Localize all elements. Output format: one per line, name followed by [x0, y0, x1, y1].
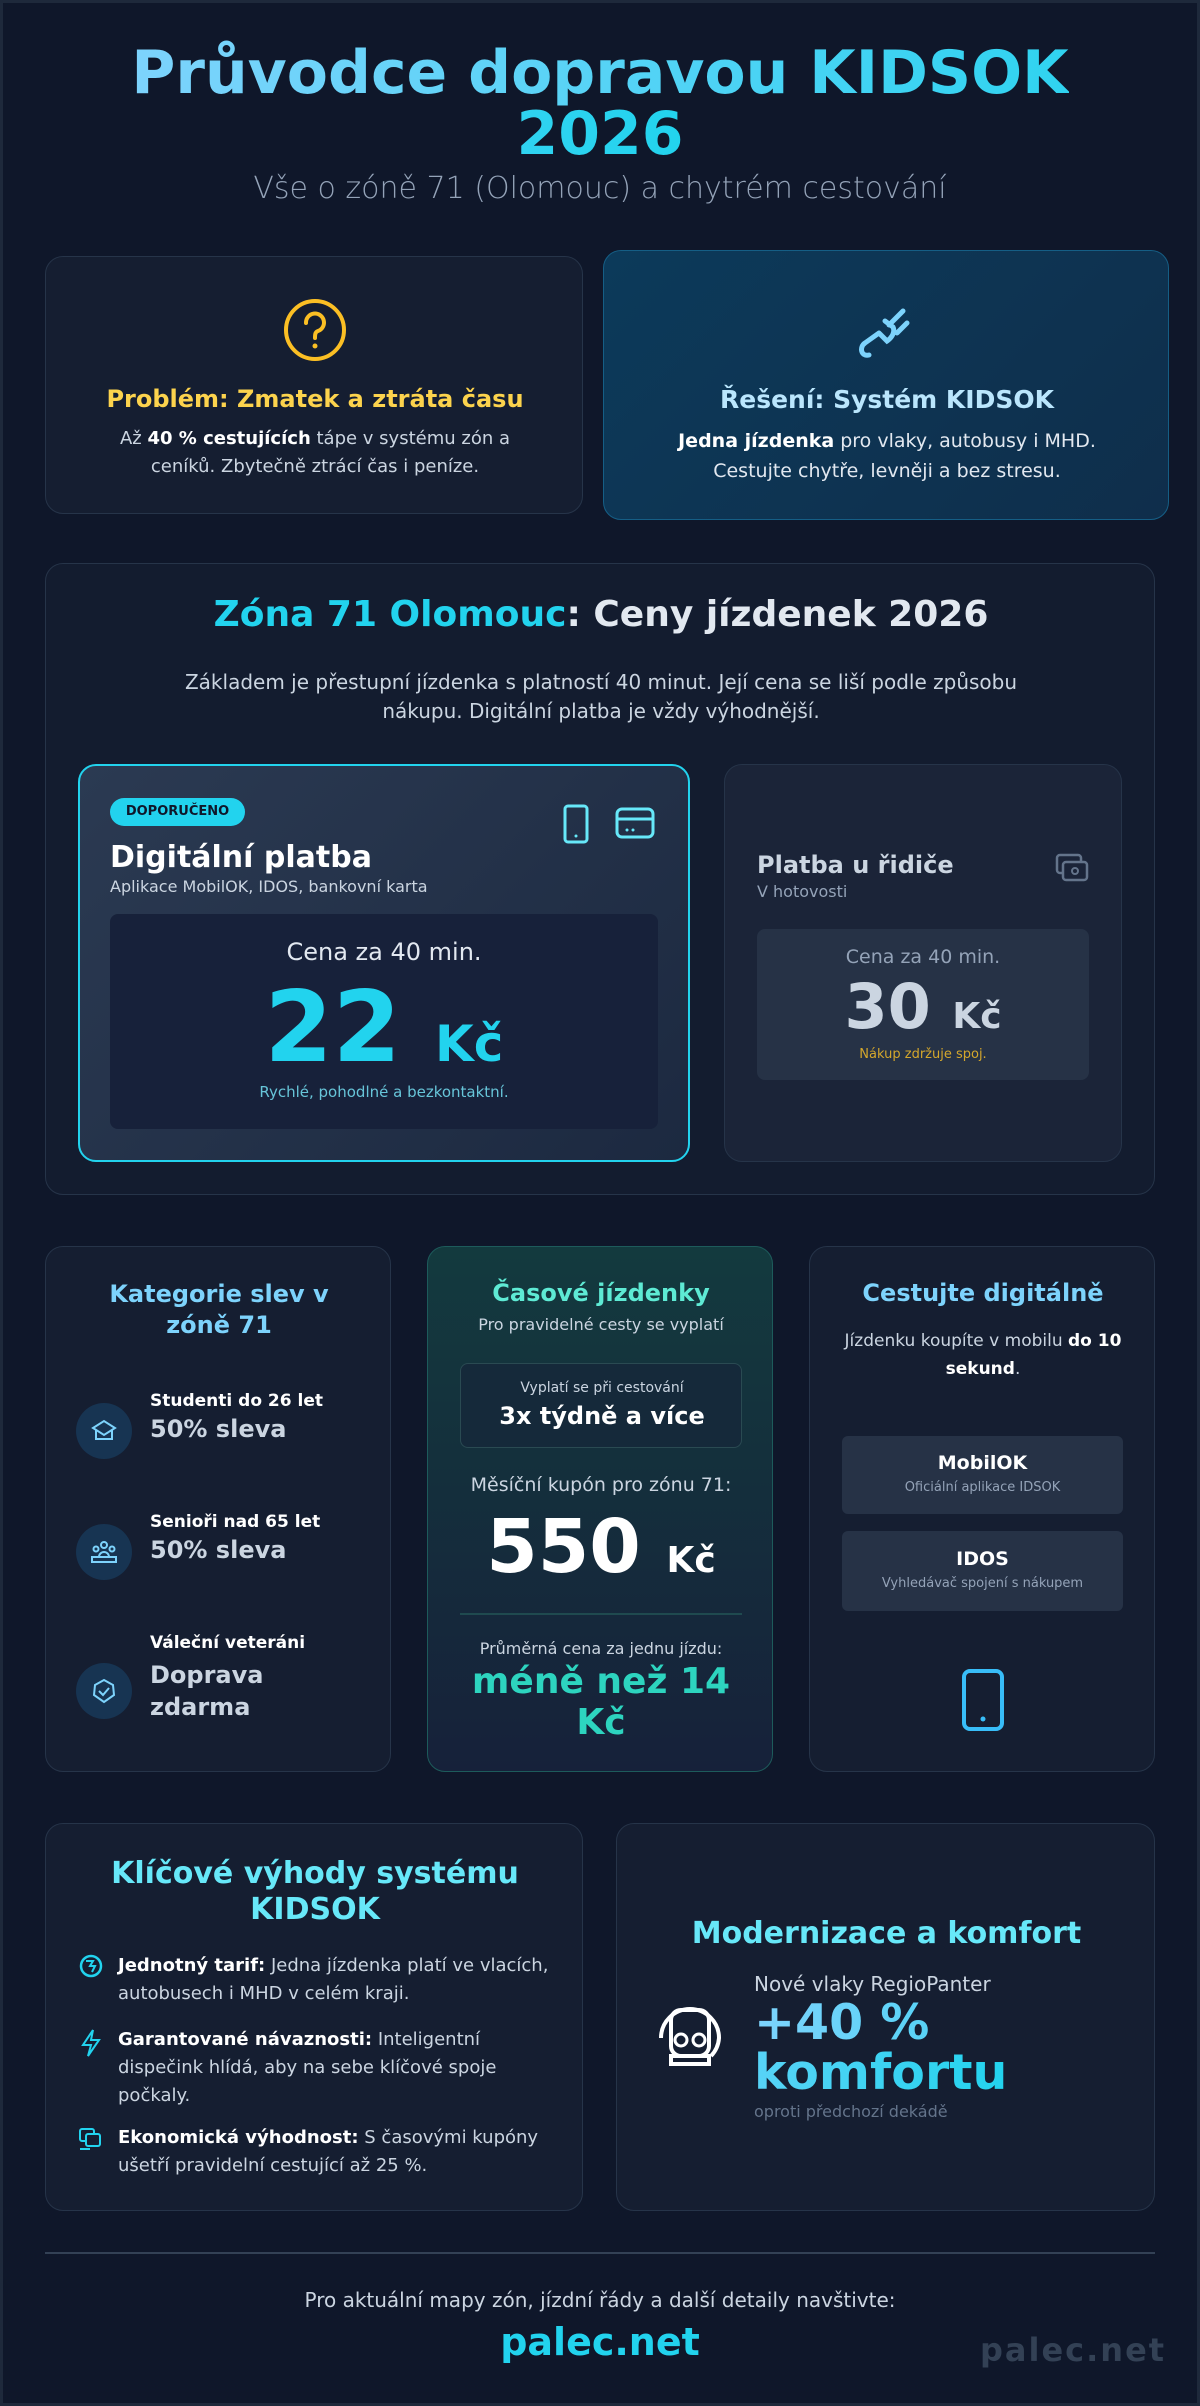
panel: modernization [616, 1823, 1155, 2211]
app: MobilOK [842, 1436, 1123, 1514]
icon: cash [1056, 854, 1088, 882]
heading: Modernizace a komfort [692, 1916, 1081, 1951]
price box: Nákup zdržuje spoj. [859, 1047, 987, 1062]
stat: oproti předchozí dekádě [754, 2102, 948, 2121]
icon: card [616, 808, 654, 838]
text: Až 40 % cestujících tápe v systému zón a ceníků. Zbytečně ztrácí čas i peníze. [120, 428, 510, 477]
app: MobilOK: MobilOK [938, 1452, 1027, 1474]
heading: Zóna 71 Olomouc: Ceny jízdenek 2026 [214, 594, 988, 635]
text: Jedna jízdenka pro vlaky, autobusy i MHD. [678, 430, 1096, 452]
heading: Klíčové výhody systému [111, 1856, 519, 1891]
app: MobilOK: Oficiální aplikace IDSOK [905, 1480, 1060, 1495]
text [677, 430, 1096, 482]
footer link: palec.net [500, 2320, 700, 2364]
item: seniors: Senioři nad 65 let [150, 1512, 320, 1532]
heading: Řešení: Systém KIDSOK [720, 385, 1054, 414]
panel: problem [45, 256, 583, 514]
icon: train [659, 2007, 721, 2066]
icon: plug [859, 308, 910, 358]
title: Průvodce dopravou KIDSOK [131, 38, 1069, 108]
text: Jízdenku koupíte v mobilu do 10 sekund. [845, 1331, 1121, 1379]
badge [110, 798, 245, 826]
item: seniors [76, 1512, 320, 1580]
icon: phone [962, 1669, 1004, 1731]
watermark: palec.net [980, 2331, 1166, 2369]
heading: zóně 71 [166, 1311, 272, 1339]
subtitle: V hotovosti [757, 882, 847, 901]
panel: time tickets [427, 1246, 773, 1772]
badge: DOPORUČENO [126, 804, 229, 819]
stat: Nové vlaky RegioPanter [754, 1972, 991, 1996]
icon: question [284, 299, 346, 361]
app: IDOS: Vyhledávač spojení s nákupem [882, 1576, 1083, 1591]
item: seniors: 50% sleva [150, 1536, 286, 1564]
benefit: connections: Garantované návaznosti: Inteligentní dispečink hlídá, aby na sebe klíčové spoje počkaly. [118, 2029, 496, 2106]
heading: Cestujte digitálně [862, 1279, 1104, 1307]
card: cash payment [724, 764, 1122, 1162]
app: IDOS [842, 1531, 1123, 1611]
heading [109, 1280, 329, 1339]
heading [111, 1856, 519, 1927]
panel: time tickets: Kč [576, 1702, 626, 1743]
panel: digital [809, 1246, 1155, 1772]
item: students: Studenti do 26 let [150, 1391, 323, 1411]
item: veterans: Doprava [150, 1661, 263, 1689]
average price: Průměrná cena za jednu jízdu: [480, 1639, 722, 1658]
box: frequency: 3x týdně a více [499, 1402, 705, 1430]
subtitle: Pro pravidelné cesty se vyplatí [478, 1315, 724, 1334]
subtitle: Vše o zóně 71 (Olomouc) a chytrém cestování [253, 171, 947, 206]
panel: zone 71 prices [45, 563, 1155, 1195]
item: veterans [76, 1633, 305, 1721]
price box: Rychlé, pohodlné a bezkontaktní. [259, 1083, 509, 1101]
price box: Cena za 40 min. [286, 938, 482, 966]
heading: KIDSOK [250, 1892, 380, 1927]
panel: key benefits [45, 1823, 583, 2211]
title: 2026 [516, 99, 684, 169]
price box: 22 Kč [265, 971, 503, 1085]
app: IDOS: IDOS [956, 1548, 1009, 1570]
stat: komfortu [754, 2044, 1007, 2101]
title [131, 38, 1069, 169]
monthly price: Měsíční kupón pro zónu 71: [471, 1474, 731, 1496]
item: veterans: Váleční veteráni [150, 1633, 305, 1653]
price box [757, 929, 1089, 1080]
item: students: 50% sleva [150, 1415, 286, 1443]
text: Cestujte chytře, levněji a bez stresu. [713, 460, 1061, 482]
item: veterans: zdarma [150, 1693, 250, 1721]
panel: solution [603, 250, 1169, 520]
stat: +40 % [754, 1994, 929, 2051]
footer text: Pro aktuální mapy zón, jízdní řády a další detaily navštivte: [304, 2288, 896, 2312]
box: frequency: Vyplatí se při cestování [520, 1380, 684, 1396]
price box [110, 914, 658, 1129]
title: Digitální platba [110, 840, 372, 875]
panel: time tickets: méně než 14 [472, 1661, 730, 1702]
title: Platba u řidiče [757, 851, 954, 879]
subtitle: Aplikace MobilOK, IDOS, bankovní karta [110, 877, 428, 896]
stat [754, 1972, 1007, 2121]
item: students [76, 1391, 323, 1459]
description: Základem je přestupní jízdenka s platností 40 minut. Její cena se liší podle způsobu nákupu. Digitální platba je vždy výhodnější. [185, 670, 1017, 723]
benefit: tariff: Jednotný tarif: Jedna jízdenka platí ve vlacích, autobusech i MHD v celém kraji. [118, 1955, 548, 2004]
panel: time tickets: 550 Kč [486, 1504, 716, 1590]
heading: Kategorie slev v [109, 1280, 329, 1308]
benefit: economy: Ekonomická výhodnost: S časovými kupóny ušetří pravidelní cestující až 25 %. [118, 2127, 538, 2176]
card: digital payment [78, 764, 690, 1162]
panel: discounts [45, 1246, 391, 1772]
box: frequency [460, 1363, 742, 1448]
price box: 30 Kč [844, 970, 1002, 1043]
heading: Časové jízdenky [492, 1279, 710, 1307]
heading: Problém: Zmatek a ztráta času [106, 385, 524, 413]
icon: phone [564, 804, 588, 844]
price box: Cena za 40 min. [846, 946, 1000, 968]
